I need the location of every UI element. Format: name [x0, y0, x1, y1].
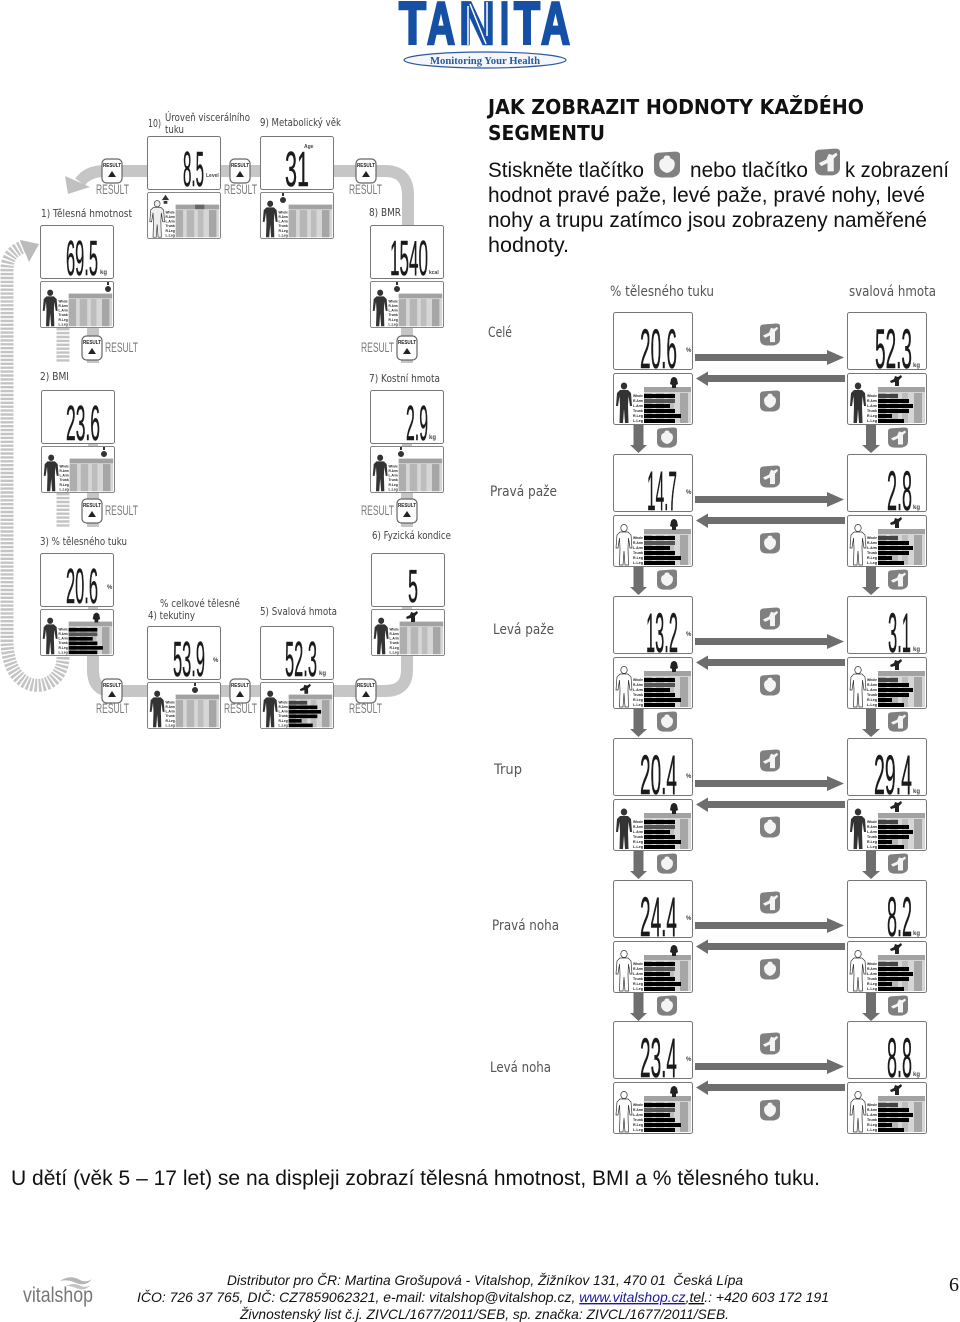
step 9: metabolic age: Age [304, 144, 314, 150]
row 4 connecting arrows [630, 749, 908, 879]
step 8: BMR [369, 206, 444, 328]
step 7: bone mass: kg [429, 435, 436, 441]
text: 24.4 [640, 885, 677, 948]
result labels: RESULT [105, 502, 138, 518]
result buttons [82, 159, 417, 703]
step 10: visceral fat level: Úroveň viscerálního [165, 111, 250, 124]
step 6: physique rating: 6) Fyzická kondice [372, 529, 451, 542]
step 7: bone mass: 2.9 [406, 397, 428, 451]
display: whole body muscle [848, 312, 926, 424]
result labels: RESULT [224, 700, 257, 716]
page number: 6 [949, 1274, 959, 1296]
icon: arm button [815, 149, 840, 175]
display: left leg fat: % [686, 1057, 692, 1063]
display: left arm fat: % [686, 632, 692, 638]
display: whole body fat [614, 312, 692, 424]
step 5: muscle mass [260, 605, 337, 729]
result labels: RESULT [349, 181, 382, 197]
display: right leg fat [614, 880, 692, 992]
note about children: U dětí (věk 5 – 17 let) se na displeji zobrazí tělesná hmotnost, BMI a % tělesného tuku. [11, 1167, 820, 1190]
instruction text with button icons: hodnoty. [488, 234, 569, 257]
step 7: bone mass: 7) Kostní hmota [369, 372, 440, 385]
result labels: RESULT [224, 181, 257, 197]
display: right arm fat [614, 454, 692, 566]
step 5: muscle mass: kg [319, 671, 326, 677]
step 4: total body water [147, 597, 240, 729]
display: whole body fat: % [686, 348, 692, 354]
row 3 connecting arrows [630, 607, 908, 737]
display: right leg fat: % [686, 916, 692, 922]
step 9: metabolic age [260, 116, 341, 239]
step 5: muscle mass: 52.3 [285, 633, 317, 687]
text: 23.4 [640, 1026, 677, 1089]
instruction text with button icons: Stiskněte tlačítko [488, 159, 644, 182]
flow loop: striped return path [7, 240, 63, 685]
footer contact details: Živnostenský list č.j. ZIVCL/1677/2011/SEB, sp. značka: ZIVCL/1677/2011/SEB. [239, 1306, 729, 1322]
step 10: visceral fat level [147, 111, 250, 239]
row labels: Levá noha [490, 1060, 551, 1076]
text: 14.7 [647, 459, 677, 522]
row labels: Celé [488, 325, 512, 341]
display: left leg muscle [848, 1022, 926, 1134]
step 7: bone mass [369, 372, 444, 493]
text: 13.2 [646, 601, 678, 664]
instruction text with button icons [488, 149, 949, 257]
step 10: visceral fat level: tuku [165, 123, 184, 136]
result labels: RESULT [96, 181, 129, 197]
step 8: BMR: 8) BMR [369, 206, 401, 219]
step 4: total body water: 4) tekutiny [148, 609, 195, 622]
footer contact details [137, 1272, 829, 1322]
display: trunk fat [614, 738, 692, 850]
row 1 connecting arrows [630, 323, 908, 453]
display: right leg muscle: kg [913, 931, 920, 937]
step 9: metabolic age: 9) Metabolický věk [260, 116, 341, 129]
result labels: RESULT [96, 700, 129, 716]
step 1: body weight: kg [100, 270, 107, 276]
instruction text with button icons: nohy a trupu zatímco jsou zobrazeny naměřené [488, 209, 927, 232]
row labels: Pravá noha [492, 918, 559, 934]
step 6: physique rating: 5 [408, 560, 418, 612]
column heading: body fat: % tělesného tuku [610, 284, 714, 300]
display: left leg muscle: kg [913, 1072, 920, 1078]
step 3: body fat percent: % [107, 585, 113, 591]
step 10: visceral fat level: Level [206, 173, 219, 179]
display: right arm muscle: kg [913, 505, 920, 511]
display: left arm muscle [848, 596, 926, 708]
step 8: BMR: kcal [429, 270, 439, 276]
step 4: total body water: % celkové tělesné [160, 597, 240, 610]
step 2: BMI [40, 370, 115, 493]
row labels [488, 325, 559, 1076]
text: 20.4 [640, 743, 677, 806]
step 2: BMI: 23.6 [66, 397, 100, 451]
result labels: RESULT [349, 700, 382, 716]
logo: Tanita: Monitoring Your Health [430, 55, 540, 67]
display: trunk muscle [848, 738, 926, 850]
step 10: visceral fat level: 10) [148, 117, 161, 130]
footer contact details: Distributor pro ČR: Martina Grošupová - Vitalshop, Žižníkov 131, 470 01 Česká Lípa [227, 1272, 743, 1288]
display: trunk muscle: kg [913, 789, 920, 795]
heading: JAK ZOBRAZIT HODNOTY KAŽDÉHO [486, 95, 864, 119]
step 2: BMI: 2) BMI [40, 370, 69, 383]
row labels: Levá paže [493, 622, 554, 638]
step 1: body weight: 69.5 [66, 232, 98, 286]
display: trunk fat: % [686, 774, 692, 780]
display: right leg muscle [848, 880, 926, 992]
display: whole body muscle: kg [913, 363, 920, 369]
result labels: RESULT [361, 339, 394, 355]
display: left arm fat [614, 596, 692, 708]
instruction text with button icons: hodnot pravé paže, levé paže, pravé nohy, levé [488, 184, 925, 207]
heading [486, 95, 864, 145]
logo: Tanita [399, 0, 570, 68]
step 10: visceral fat level: 8.5 [183, 143, 204, 197]
text: 1540 [390, 232, 428, 286]
row 6 connecting arrows [695, 1032, 845, 1121]
text: 20.6 [640, 317, 677, 380]
step 4: total body water: % [213, 658, 219, 664]
result labels [96, 181, 394, 716]
logo: vitalshop: vitalshop [23, 1284, 93, 1307]
display: right arm fat: % [686, 490, 692, 496]
instruction text with button icons: k zobrazení [845, 159, 949, 182]
icon: torso button [654, 152, 680, 177]
column heading: muscle mass: svalová hmota [849, 284, 936, 300]
heading: SEGMENTU [488, 121, 605, 145]
step 3: body fat percent: 20.6 [66, 560, 98, 614]
step 3: body fat percent: 3) % tělesného tuku [40, 535, 127, 548]
row labels: Trup [493, 762, 522, 778]
step 1: body weight: 1) Tělesná hmotnost [41, 207, 133, 220]
step 6: physique rating [371, 529, 451, 656]
row 5 connecting arrows [630, 891, 908, 1021]
result labels: RESULT [361, 502, 394, 518]
step 5: muscle mass: 5) Svalová hmota [260, 605, 337, 618]
step 1: body weight [40, 207, 133, 328]
step 3: body fat percent [40, 535, 127, 656]
footer contact details: IČO: 726 37 765, DIČ: CZ7859062321, e-mail: vitalshop@vitalshop.cz, www.vitalshop.cz,tel.: +420 603 172 191 [137, 1289, 829, 1305]
display: right arm muscle [848, 454, 926, 566]
display: left arm muscle: kg [913, 647, 920, 653]
step 9: metabolic age: 31 [285, 143, 309, 197]
row labels: Pravá paže [490, 484, 557, 500]
logo: vitalshop [23, 1277, 93, 1307]
step 4: total body water: 53.9 [173, 633, 205, 687]
flow loop: solid result path [65, 171, 408, 691]
display: left leg fat [614, 1022, 692, 1134]
result labels: RESULT [105, 339, 138, 355]
row 2 connecting arrows [630, 465, 908, 595]
instruction text with button icons: nebo tlačítko [690, 159, 808, 182]
